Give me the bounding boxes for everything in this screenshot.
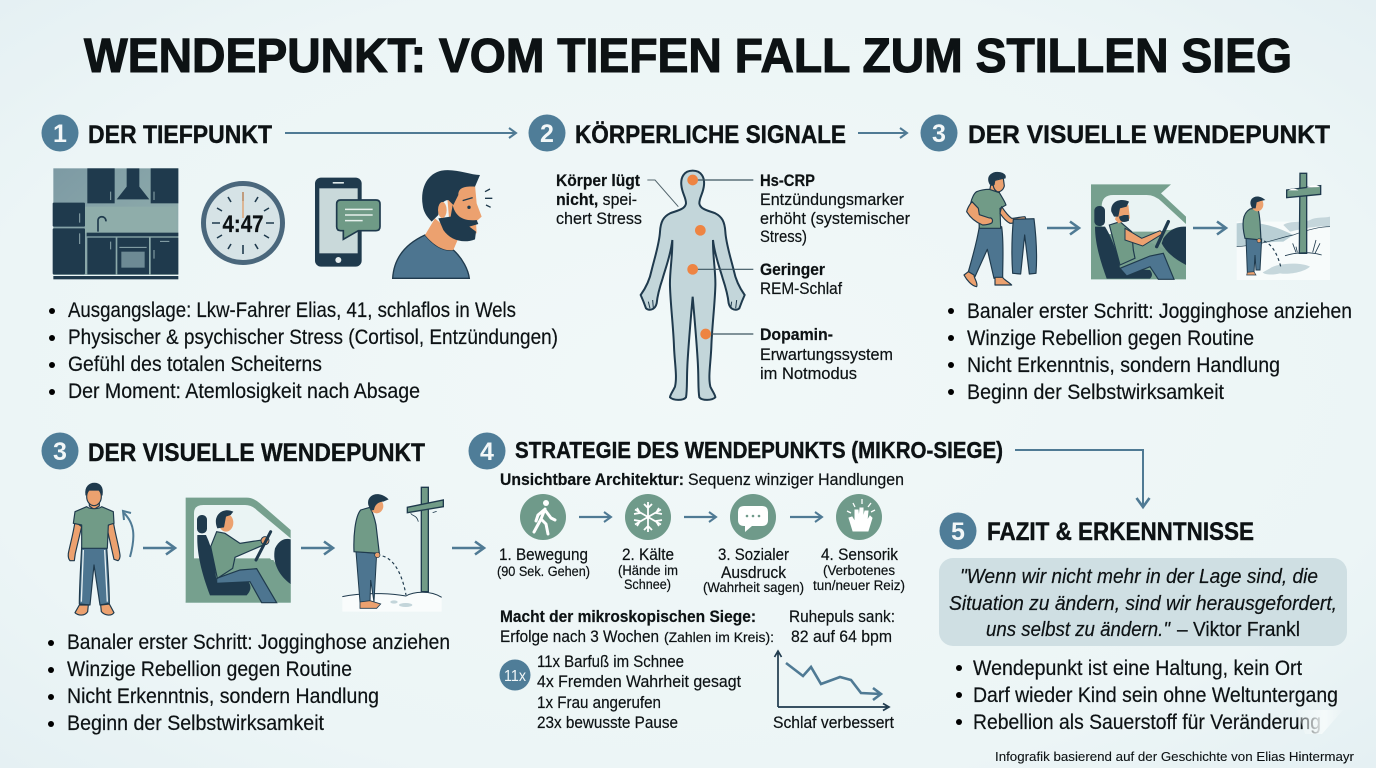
icon: walking [520, 494, 566, 540]
subheading: Unsichtbare Architektur [500, 470, 904, 489]
badge: 11x: 11x [504, 668, 526, 685]
callout: Dopamin: Dopamin- [760, 325, 833, 344]
badge 5 [940, 512, 976, 550]
callout: Dopamin [760, 325, 893, 383]
icon: man with jogging pants [964, 172, 1037, 287]
bullet list: visueller Wendepunkt bottom [48, 631, 450, 735]
list: micro wins: 11x Barfuß im Schnee [537, 652, 684, 671]
bullet list: visueller Wendepunkt top: Beginn der Selbstwirksamkeit [967, 381, 1224, 404]
icon: phone with message [315, 178, 380, 267]
callout: Körper lügt nicht [556, 171, 642, 228]
text block: Ruhepuls [789, 607, 895, 646]
quote box [939, 558, 1347, 646]
bullet list: Tiefpunkt: Der Moment: Atemlosigkeit nach Absage [68, 380, 420, 403]
bullet list: visueller Wendepunkt bottom: Winzige Rebellion gegen Routine [67, 658, 352, 681]
arrow [684, 516, 716, 518]
arrow [1047, 227, 1079, 229]
bullet list: visueller Wendepunkt top [948, 300, 1352, 404]
step label: Sensorik: 4. Sensorik [821, 545, 898, 564]
arrow: section 4 to 5 [1015, 450, 1143, 507]
bullet list: visueller Wendepunkt bottom: Beginn der Selbstwirksamkeit [67, 712, 324, 735]
callout: Hs-CRP: Stress) [760, 227, 807, 246]
callout lines [647, 180, 753, 334]
arrow [143, 547, 175, 549]
light smudge [1297, 710, 1343, 734]
panel: section 3 top [920, 114, 1352, 404]
arrow [301, 547, 333, 549]
badge 1 [42, 114, 78, 152]
arrow [1193, 227, 1226, 229]
bullet list: visueller Wendepunkt top: Winzige Rebellion gegen Routine [967, 327, 1254, 350]
panel: section 2 Körperliche Signale [528, 114, 910, 400]
step label: Sozialer Ausdruck: 3. Sozialer [718, 545, 789, 564]
badge 1: 1 [53, 120, 67, 148]
step label: Sozialer Ausdruck [703, 545, 804, 595]
icon: worried man [393, 170, 492, 278]
badge 4: 4 [480, 438, 494, 466]
badge 3: 3 [53, 438, 67, 466]
callout: Dopamin: im Notmodus [760, 364, 857, 383]
callout: Hs-CRP: Entzündungsmarker [760, 190, 904, 209]
step label: Sozialer Ausdruck: Ausdruck [721, 563, 786, 582]
icon: driver in truck cab [1091, 184, 1186, 279]
heading: Der Tiefpunkt: DER TIEFPUNKT [88, 121, 272, 149]
badge 2: 2 [540, 120, 554, 148]
badge 2 [528, 114, 566, 152]
badge 3: 3 [932, 120, 946, 148]
bullet list: Tiefpunkt [49, 299, 558, 403]
line chart: Schlaf verbessert: Schlaf verbessert [773, 713, 894, 732]
step label: Kälte: 2. Kälte [622, 545, 674, 564]
icon: driver in cab [186, 498, 291, 603]
bullet list: Fazit: Darf wieder Kind sein ohne Weltuntergang [973, 684, 1338, 707]
bullet list: visueller Wendepunkt top: Banaler erster Schritt: Jogginghose anziehen [967, 300, 1352, 323]
subheading: Unsichtbare Architektur: Sequenz winziger Handlungen [688, 470, 904, 489]
bullet list: visueller Wendepunkt bottom: Nicht Erkenntnis, sondern Handlung [67, 685, 379, 708]
text block: Macht der mikroskopischen Siege: Erfolge nach 3 Wochen [500, 627, 659, 646]
heading: Körperliche Signale: KÖRPERLICHE SIGNALE [575, 120, 846, 149]
step label: Kälte: Schnee) [624, 577, 671, 592]
panel: section 4 Strategie [468, 432, 1003, 732]
panel: section 5 Fazit [939, 512, 1347, 734]
text block: Ruhepuls: 82 auf 64 bpm [791, 627, 892, 646]
bullet list: Tiefpunkt: Gefühl des totalen Scheiterns [68, 353, 322, 376]
badge: 11x [500, 660, 530, 690]
bullet list: Fazit [956, 657, 1338, 734]
arrow: section 1 to 2 [285, 132, 516, 134]
callout: Dopamin: Erwartungssystem [760, 345, 893, 364]
heading: Fazit und Erkenntnisse: FAZIT & ERKENNTNISSE [987, 518, 1254, 546]
line chart: Schlaf verbessert [773, 651, 894, 732]
icon: man at wayside cross in snow [342, 487, 443, 612]
list: micro wins: 23x bewusste Pause [537, 713, 678, 732]
icon: speech bubble [730, 494, 776, 540]
bullet list: Fazit: Rebellion als Sauerstoff für Veränderung [973, 711, 1321, 734]
panel: section 1 Der Tiefpunkt [42, 114, 558, 403]
list: micro wins [537, 652, 741, 732]
callout: Körper lügt nicht: chert Stress [556, 209, 642, 228]
badge 3 [42, 432, 78, 470]
text block: Macht der mikroskopischen Siege [500, 607, 774, 646]
callout: Körper lügt nicht: Körper lügt [556, 171, 640, 190]
quote box: uns selbst zu ändern." [986, 618, 1172, 641]
icon: kitchen [53, 168, 178, 279]
icon: clock 4:47 [204, 184, 282, 262]
step label: Sensorik: (Verbotenes [823, 563, 895, 578]
arrow [790, 516, 822, 518]
step label: Kälte [618, 545, 678, 592]
badge 5: 5 [951, 518, 965, 546]
text block: Macht der mikroskopischen Siege: (Zahlen im Kreis): [664, 630, 774, 645]
heading: Strategie des Wendepunkts: STRATEGIE DES WENDEPUNKTS (MIKRO-SIEGE) [515, 437, 1003, 463]
bullet list: visueller Wendepunkt bottom: Banaler erster Schritt: Jogginghose anziehen [67, 631, 450, 654]
panel: section 3 bottom [42, 432, 484, 735]
quote box: Situation zu ändern, sind wir herausgefordert, [949, 592, 1337, 615]
icon: hand touching [836, 494, 882, 540]
list: micro wins: 1x Frau angerufen [537, 693, 661, 712]
text block: Macht der mikroskopischen Siege: Macht der mikroskopischen Siege: [500, 607, 756, 626]
markers [687, 175, 711, 339]
arrow [452, 547, 484, 549]
icon: man standing in joggers [68, 483, 120, 615]
quote box: "Wenn wir nicht mehr in der Lage sind, die [960, 565, 1318, 588]
bullet list: visueller Wendepunkt top: Nicht Erkenntnis, sondern Handlung [967, 354, 1280, 377]
step label: Bewegung: 1. Bewegung [499, 545, 588, 564]
title: WENDEPUNKT: VOM TIEFEN FALL ZUM STILLEN SIEG [84, 30, 1292, 83]
text block: Ruhepuls: Ruhepuls sank: [789, 607, 895, 626]
icon: snowflake [625, 494, 671, 540]
subheading: Unsichtbare Architektur: Unsichtbare Architektur: [500, 470, 684, 489]
arrow [579, 516, 611, 518]
step label: Sozialer Ausdruck: (Wahrheit sagen) [703, 580, 804, 595]
quote box: – Viktor Frankl [1177, 618, 1300, 641]
list: micro wins: 4x Fremden Wahrheit gesagt [537, 672, 741, 691]
footer credit: Infografik basierend auf der Geschichte von Elias Hintermayr [995, 749, 1355, 764]
callout: Hs-CRP: erhöht (systemischer [760, 209, 910, 228]
heading: Der visuelle Wendepunkt: DER VISUELLE WENDEPUNKT [88, 439, 425, 467]
bullet list: Fazit: Wendepunkt ist eine Haltung, kein Ort [973, 657, 1302, 680]
icon: clock 4:47: 4:47 [222, 211, 264, 238]
bullet list: Tiefpunkt: Ausgangslage: Lkw-Fahrer Elias, 41, schlaflos in Wels [68, 299, 516, 322]
callout: Körper lügt nicht: nicht, spei- [556, 190, 637, 209]
badge 4 [468, 432, 506, 470]
bullet list: Tiefpunkt: Physischer & psychischer Stress (Cortisol, Entzündungen) [68, 326, 558, 349]
step label: Kälte: (Hände im [618, 563, 678, 578]
step label: Bewegung: (90 Sek. Gehen) [497, 564, 590, 579]
callout: Geringer REM-Schlaf: REM-Schlaf [760, 279, 842, 298]
step label: Sensorik [813, 545, 905, 593]
step label: Sensorik: tun/neuer Reiz) [813, 578, 905, 593]
callout: Geringer REM-Schlaf [760, 260, 842, 298]
badge 3 [920, 114, 958, 152]
callout: Hs-CRP [760, 171, 910, 246]
callout: Hs-CRP: Hs-CRP [760, 171, 815, 190]
callout: Geringer REM-Schlaf: Geringer [760, 260, 825, 279]
arrow: section 2 to 3 [858, 132, 907, 134]
icon: curved up arrow [123, 511, 133, 557]
icon: man at wayside cross in snow [1237, 173, 1330, 280]
body diagram [641, 171, 753, 400]
step label: Bewegung [497, 545, 590, 579]
heading: Der visuelle Wendepunkt: DER VISUELLE WENDEPUNKT [968, 121, 1330, 149]
